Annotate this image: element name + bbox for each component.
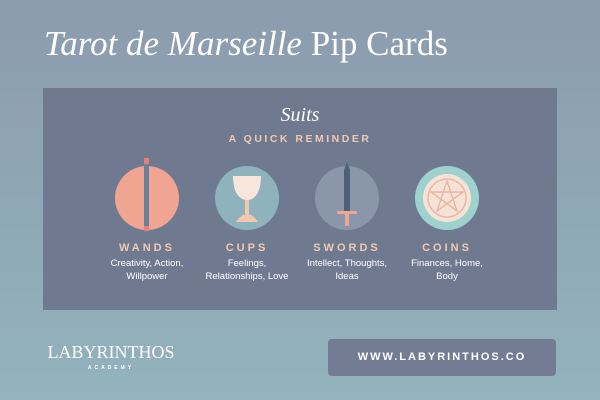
- text: cups: Relationships, Love: [206, 271, 288, 282]
- text: cups: Feelings,: [228, 258, 266, 269]
- text: swords: Intellect, Thoughts,: [307, 258, 387, 269]
- text: swords: Ideas: [335, 271, 359, 282]
- logo: [47, 342, 174, 371]
- logo: LABYRINTHOS: [47, 342, 174, 362]
- text: coins: Body: [436, 271, 458, 282]
- text: wands: [111, 258, 183, 282]
- icon: sword: [315, 162, 379, 230]
- text: wands: Creativity, Action,: [111, 258, 183, 269]
- text: wands: Willpower: [126, 271, 168, 282]
- label: swords: SWORDS: [313, 242, 381, 254]
- panel heading: Suits: [281, 104, 319, 126]
- label: cups: CUPS: [226, 242, 268, 254]
- label: wands: WANDS: [119, 242, 175, 254]
- logo: ACADEMY: [88, 365, 134, 371]
- icon: cup: [215, 166, 279, 230]
- subheading: A QUICK REMINDER: [229, 133, 371, 145]
- text: coins: [411, 258, 483, 282]
- url button: WWW.LABYRINTHOS.CO: [358, 351, 526, 363]
- icon: wand: [115, 158, 179, 232]
- url button: [328, 339, 556, 376]
- icon: coin: [415, 166, 479, 230]
- label: coins: COINS: [422, 242, 472, 254]
- title: Tarot de Marseille Pip Cards: [44, 24, 448, 63]
- text: swords: [307, 258, 387, 282]
- text: coins: Finances, Home,: [411, 258, 483, 269]
- text: cups: [206, 258, 288, 282]
- panel: suits: [43, 88, 557, 310]
